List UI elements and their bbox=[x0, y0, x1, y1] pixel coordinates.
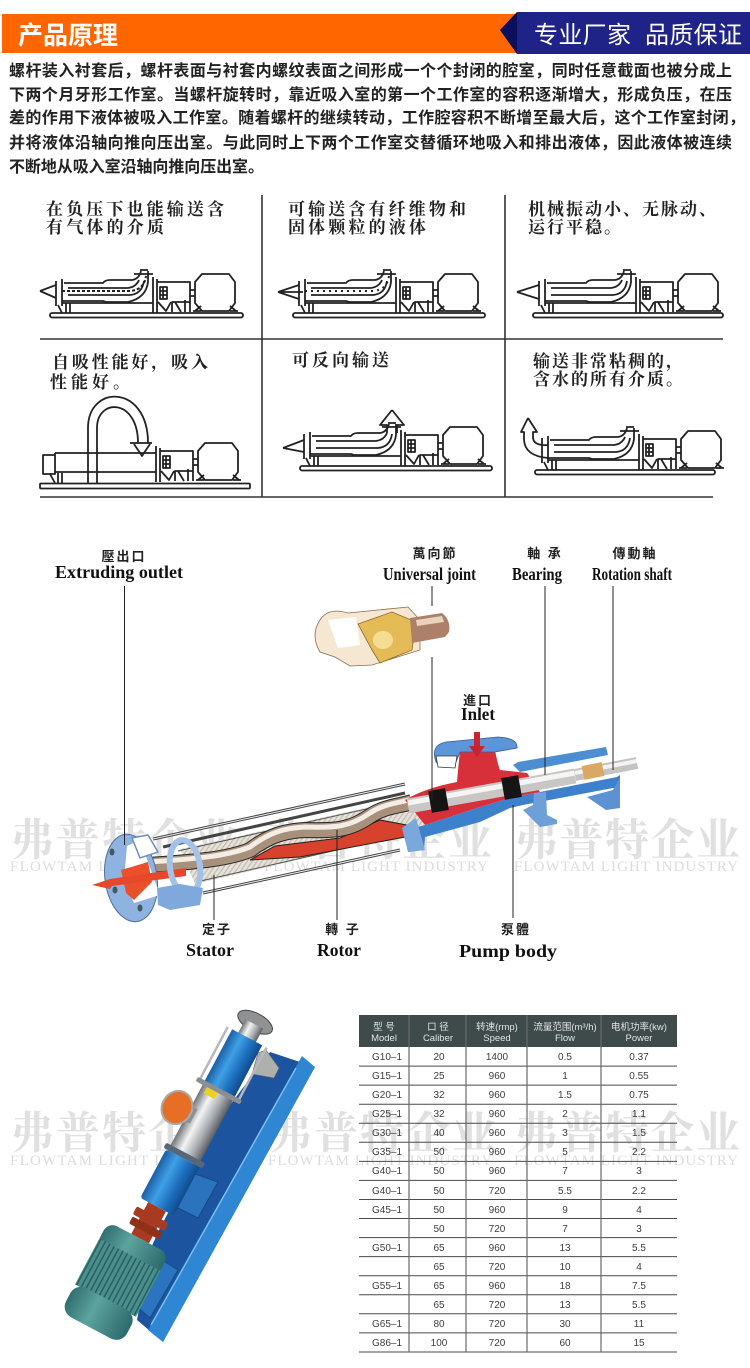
table rows: 720 bbox=[489, 1224, 506, 1235]
header orange bar bbox=[2, 14, 518, 53]
label: rotor: 轉 子 bbox=[325, 922, 361, 937]
panel: fibre and solids: 固体颗粒的液体 bbox=[288, 218, 426, 237]
table header: Flow bbox=[555, 1033, 575, 1044]
table rows: 40 bbox=[433, 1128, 445, 1139]
table rows: 65 bbox=[433, 1262, 445, 1273]
table rows: 1400 bbox=[486, 1052, 509, 1063]
table rows: 50 bbox=[433, 1166, 445, 1177]
table rows: 3 bbox=[636, 1224, 642, 1235]
base plate bbox=[137, 1052, 315, 1342]
label: extruding outlet: 壓出口 bbox=[101, 549, 147, 564]
table rows: G50–1 bbox=[372, 1243, 402, 1254]
label: rotation shaft bbox=[592, 546, 672, 584]
table rows: 960 bbox=[489, 1166, 506, 1177]
outlet flange bbox=[99, 831, 163, 925]
table rows: 5 bbox=[562, 1147, 568, 1158]
table rows: 65 bbox=[433, 1300, 445, 1311]
table rows: 11 bbox=[634, 1319, 645, 1330]
table rows: 100 bbox=[431, 1338, 448, 1349]
pump body upper casing bbox=[513, 747, 608, 772]
panel: low vibration bbox=[517, 199, 723, 318]
label: bearing: 軸 承 bbox=[527, 546, 563, 561]
watermark row: upper: FLOWTAM LIGHT INDUSTRY bbox=[10, 859, 238, 875]
table rows: 2 bbox=[562, 1109, 568, 1120]
table rows: 960 bbox=[489, 1281, 506, 1292]
table rows: 960 bbox=[489, 1243, 506, 1254]
panel: reversible bbox=[283, 350, 492, 470]
blue bearing body bbox=[140, 1149, 200, 1216]
header slogan bbox=[534, 22, 742, 49]
label: universal joint: 萬向節 bbox=[412, 546, 458, 561]
motor fan cover bbox=[60, 1283, 137, 1344]
inlet flange bbox=[434, 737, 517, 766]
table rows: 1 bbox=[562, 1071, 568, 1082]
header slogan: 品质保证 bbox=[645, 22, 742, 49]
table rows: 50 bbox=[433, 1147, 445, 1158]
table rows: G15–1 bbox=[372, 1071, 402, 1082]
motor top cap bbox=[96, 1222, 169, 1277]
label: rotation shaft: Rotation shaft bbox=[592, 564, 672, 584]
panel: fibre and solids bbox=[278, 199, 485, 318]
table rows: G55–1 bbox=[372, 1281, 402, 1292]
table rows: 20 bbox=[433, 1052, 445, 1063]
table rows: 960 bbox=[489, 1090, 506, 1101]
table rows: G65–1 bbox=[372, 1319, 402, 1330]
table header: 型 号 bbox=[373, 1022, 395, 1033]
tie rods bbox=[199, 1027, 267, 1101]
table rows: 0.37 bbox=[629, 1052, 649, 1063]
label: pump body: Pump body bbox=[459, 941, 557, 961]
watermark row: lower bbox=[10, 1109, 740, 1169]
outlet neck bbox=[238, 1019, 263, 1043]
motor ribs bbox=[75, 1238, 160, 1317]
stainless suction housing bbox=[170, 1083, 234, 1163]
table header: 口 径 bbox=[427, 1021, 449, 1033]
blue stator cylinder bbox=[204, 1029, 262, 1098]
pump and motor assembly bbox=[53, 994, 289, 1344]
table rows: 5.5 bbox=[632, 1243, 646, 1254]
inlet arrow bbox=[469, 732, 485, 757]
label: pump body bbox=[459, 922, 557, 961]
panel: high viscosity: 含水的所有介质。 bbox=[533, 369, 683, 389]
watermark row: lower: FLOWTAM LIGHT INDUSTRY bbox=[514, 1153, 738, 1169]
table rows: 7.5 bbox=[632, 1281, 646, 1292]
header blue tag bbox=[517, 12, 750, 54]
label: bearing: Bearing bbox=[512, 564, 562, 584]
table rows: 0.55 bbox=[629, 1071, 649, 1082]
table rows: 720 bbox=[489, 1300, 506, 1311]
table rows: G35–1 bbox=[372, 1147, 402, 1158]
panel: low vibration: 机械振动小、无脉动、 bbox=[528, 199, 716, 219]
table rows: 80 bbox=[433, 1319, 445, 1330]
panel: negative pressure: 在负压下也能输送含 bbox=[46, 199, 224, 219]
outlet clamp bbox=[132, 835, 204, 910]
intro paragraph: 差的作用下液体被吸入工作室。随着螺杆的继续转动，工作腔容积不断增至最大后，这个工作室封闭， bbox=[9, 108, 745, 127]
table rows: 4 bbox=[636, 1205, 642, 1216]
label: universal joint bbox=[383, 546, 476, 584]
watermark row: lower: 弗普特企业 bbox=[10, 1109, 238, 1158]
table rows: 960 bbox=[489, 1109, 506, 1120]
table rows: 960 bbox=[489, 1071, 506, 1082]
intro paragraph: 螺杆装入衬套后，螺杆表面与衬套内螺纹表面之间形成一个个封闭的腔室，同时任意截面也被分成上 bbox=[9, 61, 732, 80]
table rows: 720 bbox=[489, 1186, 506, 1197]
base plate light edge bbox=[148, 1056, 315, 1342]
red suction cavity bbox=[405, 750, 540, 825]
table header: 电机功率(kw) bbox=[611, 1021, 667, 1033]
table rows: 9 bbox=[562, 1205, 568, 1216]
table rows: 960 bbox=[489, 1128, 506, 1139]
table rows: G86–1 bbox=[372, 1338, 402, 1349]
table header: 流量范围(m³/h) bbox=[533, 1021, 597, 1033]
label: stator: 定子 bbox=[202, 922, 232, 937]
table rows: 50 bbox=[433, 1205, 445, 1216]
lower collar bbox=[163, 1143, 205, 1169]
watermark row: upper: 弗普特企业 bbox=[264, 816, 492, 865]
rotor cavity red bbox=[250, 820, 412, 860]
panel: self priming: 自吸性能好，吸入 bbox=[52, 352, 208, 373]
specification table bbox=[359, 1015, 677, 1352]
label: extruding outlet: Extruding outlet bbox=[55, 562, 183, 582]
panel: negative pressure bbox=[40, 199, 243, 318]
table rows: 18 bbox=[559, 1281, 571, 1292]
panel: self priming bbox=[40, 352, 250, 488]
product photo: vertical pump bbox=[53, 994, 315, 1344]
label: inlet: 進口 bbox=[463, 693, 493, 708]
pump body lower casing bbox=[408, 775, 620, 852]
label: universal joint: Universal joint bbox=[383, 564, 476, 584]
label: rotor: Rotor bbox=[317, 940, 361, 960]
header banner bbox=[2, 12, 750, 54]
table rows: 0.5 bbox=[558, 1052, 572, 1063]
upper collar bbox=[196, 1077, 242, 1105]
watermark row: upper bbox=[10, 816, 740, 875]
intro paragraph: 下两个月牙形工作室。当螺杆旋转时，靠近吸入室的第一个工作室的容积逐渐增大，形成负压，在压 bbox=[9, 85, 732, 104]
table rows: G10–1 bbox=[372, 1052, 402, 1063]
table rows: 65 bbox=[433, 1243, 445, 1254]
table rows: 13 bbox=[559, 1300, 571, 1311]
table rows: 960 bbox=[489, 1205, 506, 1216]
table rows: 720 bbox=[489, 1338, 506, 1349]
intro paragraph: 不断地从吸入室沿轴向推向压出室。 bbox=[9, 157, 264, 176]
table rows bbox=[372, 1052, 649, 1349]
table rows: 720 bbox=[489, 1262, 506, 1273]
orange inlet neck bbox=[174, 1101, 198, 1123]
table rows: 5.5 bbox=[558, 1186, 572, 1197]
outlet arrow bbox=[92, 868, 186, 889]
watermark row: upper: FLOWTAM LIGHT INDUSTRY bbox=[514, 859, 738, 875]
table rows: G45–1 bbox=[372, 1205, 402, 1216]
yellow tag bbox=[204, 1087, 218, 1099]
panel: fibre and solids: 可输送含有纤维物和 bbox=[288, 199, 466, 219]
header slogan: 专业厂家 bbox=[534, 22, 631, 49]
watermark row: upper: FLOWTAM LIGHT INDUSTRY bbox=[264, 859, 488, 875]
label: pump body: 泵體 bbox=[501, 922, 531, 937]
watermark row: lower: 弗普特企业 bbox=[268, 1109, 496, 1158]
table rows: 2.2 bbox=[632, 1147, 646, 1158]
label: rotation shaft: 傳動軸 bbox=[612, 546, 658, 561]
pump feet bbox=[523, 778, 620, 827]
lower mount block bbox=[172, 1170, 218, 1218]
label: inlet: Inlet bbox=[461, 704, 495, 724]
label: inlet bbox=[461, 693, 495, 724]
table rows: 13 bbox=[559, 1243, 571, 1254]
table rows: 3 bbox=[636, 1166, 642, 1177]
panel: high viscosity: 输送非常粘稠的， bbox=[533, 351, 683, 372]
base plate bright line bbox=[151, 1068, 296, 1325]
table rows: 10 bbox=[559, 1262, 571, 1273]
table rows: 0.75 bbox=[629, 1090, 649, 1101]
intro paragraph: 并将液体沿轴向推向压出室。与此同时上下两个工作室交替循环地吸入和排出液体，因此液体被连续 bbox=[9, 133, 732, 152]
table rows: 30 bbox=[559, 1319, 571, 1330]
table rows: 1.5 bbox=[632, 1128, 646, 1139]
rotor and clamp bbox=[402, 818, 425, 852]
table header bbox=[359, 1015, 677, 1047]
drive shaft bbox=[408, 761, 637, 806]
watermark row: lower: FLOWTAM LIGHT INDUSTRY bbox=[268, 1153, 492, 1169]
table rows: 15 bbox=[633, 1338, 645, 1349]
universal joint detail bbox=[315, 607, 449, 666]
table rows: 32 bbox=[433, 1090, 445, 1101]
table header: Power bbox=[626, 1033, 652, 1044]
header navy notch bbox=[500, 12, 517, 54]
table rows: G40–1 bbox=[372, 1166, 402, 1177]
table rows: 50 bbox=[433, 1186, 445, 1197]
table header: Speed bbox=[483, 1033, 511, 1044]
red coupling bbox=[133, 1206, 169, 1231]
table rows: 960 bbox=[489, 1147, 506, 1158]
panel: self priming: 性能好。 bbox=[50, 372, 130, 392]
table rows: 720 bbox=[489, 1319, 506, 1330]
table header: 转速(rmp) bbox=[476, 1021, 518, 1033]
table rows: 7 bbox=[562, 1224, 568, 1235]
upper bracket bbox=[252, 1050, 279, 1078]
rotor bbox=[150, 799, 412, 865]
leader lines bbox=[124, 586, 613, 920]
table rows: 1.1 bbox=[632, 1109, 646, 1120]
outlet flange bbox=[234, 1005, 276, 1039]
panel: high viscosity bbox=[521, 351, 724, 474]
label: rotor bbox=[317, 922, 361, 960]
table rows: 32 bbox=[433, 1109, 445, 1120]
table rows: G30–1 bbox=[372, 1128, 402, 1139]
table rows: G20–1 bbox=[372, 1090, 402, 1101]
watermark row: upper: 弗普特企业 bbox=[514, 816, 740, 865]
table rows: 3 bbox=[562, 1128, 568, 1139]
table rows: G25–1 bbox=[372, 1109, 402, 1120]
pump cutaway diagram bbox=[92, 732, 637, 925]
feature grid lines bbox=[40, 195, 723, 497]
table header: Caliber bbox=[423, 1033, 453, 1044]
table rows: 2.2 bbox=[632, 1186, 646, 1197]
rods and stator tube bbox=[153, 784, 425, 893]
label: stator: Stator bbox=[186, 940, 234, 960]
table rows: 50 bbox=[433, 1224, 445, 1235]
label: extruding outlet bbox=[55, 549, 183, 582]
watermark row: lower: FLOWTAM LIGHT INDUSTRY bbox=[10, 1153, 238, 1169]
label: stator bbox=[186, 922, 234, 960]
watermark row: lower: 弗普特企业 bbox=[514, 1109, 740, 1158]
inlet white hook bbox=[436, 756, 457, 768]
motor mount block bbox=[135, 1260, 178, 1318]
table header: Model bbox=[371, 1033, 397, 1044]
orange inlet flange bbox=[156, 1085, 198, 1130]
label: bearing bbox=[512, 546, 563, 584]
table grid bbox=[359, 1066, 677, 1352]
header title: 产品原理 bbox=[18, 22, 118, 50]
table rows: 7 bbox=[562, 1166, 568, 1177]
table rows: 65 bbox=[433, 1281, 445, 1292]
table rows: 5.5 bbox=[632, 1300, 646, 1311]
table rows: 4 bbox=[636, 1262, 642, 1273]
intro paragraph bbox=[9, 61, 745, 176]
watermark row: upper: 弗普特企业 bbox=[10, 816, 238, 865]
table rows: G40–1 bbox=[372, 1186, 402, 1197]
table rows: 1.5 bbox=[558, 1090, 572, 1101]
table rows: 25 bbox=[433, 1071, 445, 1082]
table rows: 60 bbox=[559, 1338, 571, 1349]
panel: low vibration: 运行平稳。 bbox=[528, 217, 621, 237]
panel: negative pressure: 有气体的介质 bbox=[46, 217, 164, 237]
panel: reversible: 可反向输送 bbox=[292, 350, 389, 370]
